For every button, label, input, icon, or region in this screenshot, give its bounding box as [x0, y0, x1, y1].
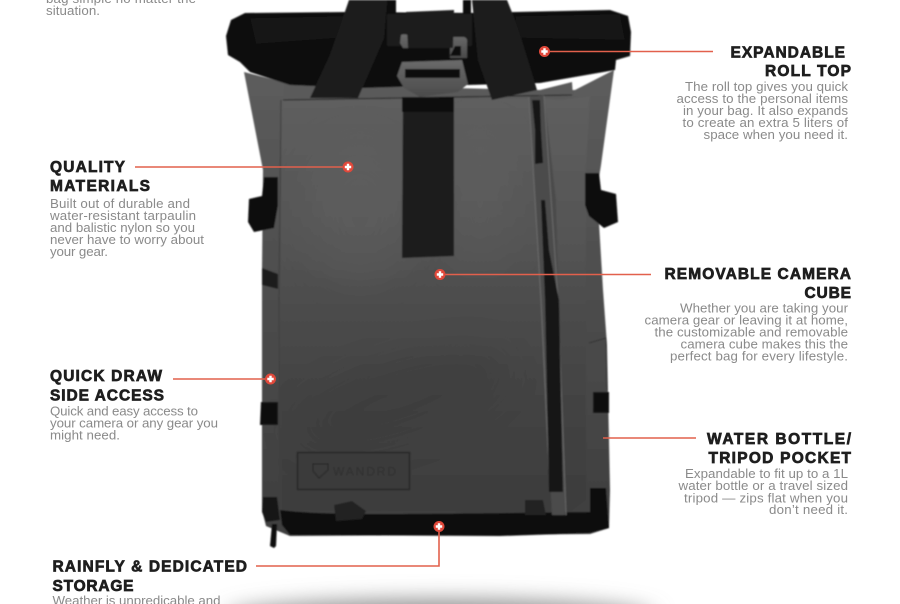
- cropped text block: top left: [46, 0, 196, 18]
- centre top loop: [406, 10, 454, 48]
- heading: CUBE: [804, 285, 851, 302]
- right side strap: [593, 392, 609, 413]
- heading: [730, 44, 851, 80]
- backpack illustration: [226, 0, 631, 548]
- description: to create an extra 5 liters of: [682, 115, 848, 130]
- description: Expandable to fit up to a 1L: [685, 466, 848, 481]
- logo patch: [298, 452, 410, 490]
- heading: [50, 368, 164, 404]
- centre webbing strap: [402, 97, 454, 258]
- description: and balistic nylon so you: [50, 220, 195, 235]
- metal hook: [400, 34, 467, 58]
- heading: REMOVABLE CAMERA: [664, 266, 851, 283]
- description: [644, 300, 849, 364]
- heading: [707, 431, 852, 467]
- ground shadow: [225, 600, 655, 604]
- description: [50, 404, 218, 442]
- right shoulder strap: [472, 0, 537, 100]
- roll top: [226, 10, 631, 88]
- description: [49, 196, 204, 259]
- left side buckle: [248, 177, 278, 232]
- zipper gusset: [529, 95, 565, 515]
- description: water bottle or a travel sized: [678, 478, 848, 493]
- logo mark: [313, 464, 328, 478]
- heading: QUICK DRAW: [50, 368, 162, 385]
- description: The roll top gives you quick: [685, 79, 848, 94]
- top carry loops: [386, 0, 471, 13]
- heading: SIDE ACCESS: [50, 388, 164, 404]
- logo wordmark: WANDRD: [333, 464, 396, 478]
- description: space when you need it.: [704, 127, 848, 142]
- front panel soft shading: [285, 130, 515, 467]
- description: in your bag. It also expands: [683, 103, 848, 118]
- heading: RAINFLY & DEDICATED: [52, 558, 247, 576]
- description: tripod — zips flat when you: [684, 490, 848, 506]
- description: water-resistant tarpaulin: [49, 208, 196, 223]
- heading: STORAGE: [52, 578, 134, 595]
- heading: TRIPOD POCKET: [708, 450, 852, 467]
- description: the customizable and removable: [654, 324, 848, 340]
- description: perfect bag for every lifestyle.: [670, 348, 848, 364]
- heading: [50, 159, 150, 195]
- heading: [52, 558, 247, 595]
- metal buckle: [397, 60, 468, 97]
- callout line: camera cube: [434, 269, 651, 280]
- callout line: rainfly: [256, 521, 444, 566]
- heading: EXPANDABLE: [730, 44, 845, 62]
- upper fold strip: [284, 82, 573, 100]
- description: Built out of durable and: [50, 196, 190, 211]
- callout line: roll top: [539, 46, 713, 57]
- description: your camera or any gear you: [50, 416, 218, 430]
- roll top fabric highlight: [250, 14, 625, 46]
- description: [678, 466, 848, 517]
- bag side panels: [244, 70, 614, 536]
- left shoulder strap: [310, 0, 387, 98]
- feature: quick draw side access: [50, 368, 218, 442]
- heading: QUALITY: [50, 159, 126, 176]
- left pocket edge: [262, 268, 278, 289]
- description: camera gear or leaving it at home,: [644, 312, 848, 328]
- right side buckle: [585, 173, 618, 228]
- left side strap: [260, 402, 278, 425]
- callout line: water bottle: [603, 437, 696, 439]
- zipper track: [541, 200, 563, 492]
- description: never have to worry about: [50, 232, 204, 247]
- callout line: quick draw: [173, 374, 276, 384]
- description: access to the personal items: [676, 91, 848, 106]
- heading: MATERIALS: [50, 178, 150, 195]
- feature: expandable roll top: [676, 44, 851, 142]
- heading: WATER BOTTLE/: [707, 431, 852, 448]
- black base: [280, 488, 609, 536]
- bottom tabs: [334, 500, 546, 521]
- description: Whether you are taking your: [680, 300, 849, 316]
- zipper pull: [532, 100, 543, 164]
- description: your gear.: [50, 244, 108, 259]
- description: camera cube makes this the: [680, 336, 848, 352]
- feature: rainfly and dedicated storage: [52, 558, 247, 604]
- feature: quality materials: [49, 159, 204, 259]
- cropped text block: top left: situation.: [46, 3, 100, 18]
- feature: water bottle tripod pocket: [678, 431, 852, 517]
- right side pocket seam: [589, 338, 607, 390]
- front panel: [280, 96, 590, 512]
- feature: removable camera cube: [644, 266, 851, 364]
- heading: ROLL TOP: [765, 63, 851, 80]
- heading: [664, 266, 851, 302]
- side zip pull: [270, 524, 277, 548]
- description: [676, 79, 848, 142]
- description: don’t need it.: [769, 502, 848, 517]
- callout line: materials: [135, 162, 354, 172]
- description: Quick and easy access to: [50, 404, 198, 418]
- description: might need.: [50, 428, 120, 442]
